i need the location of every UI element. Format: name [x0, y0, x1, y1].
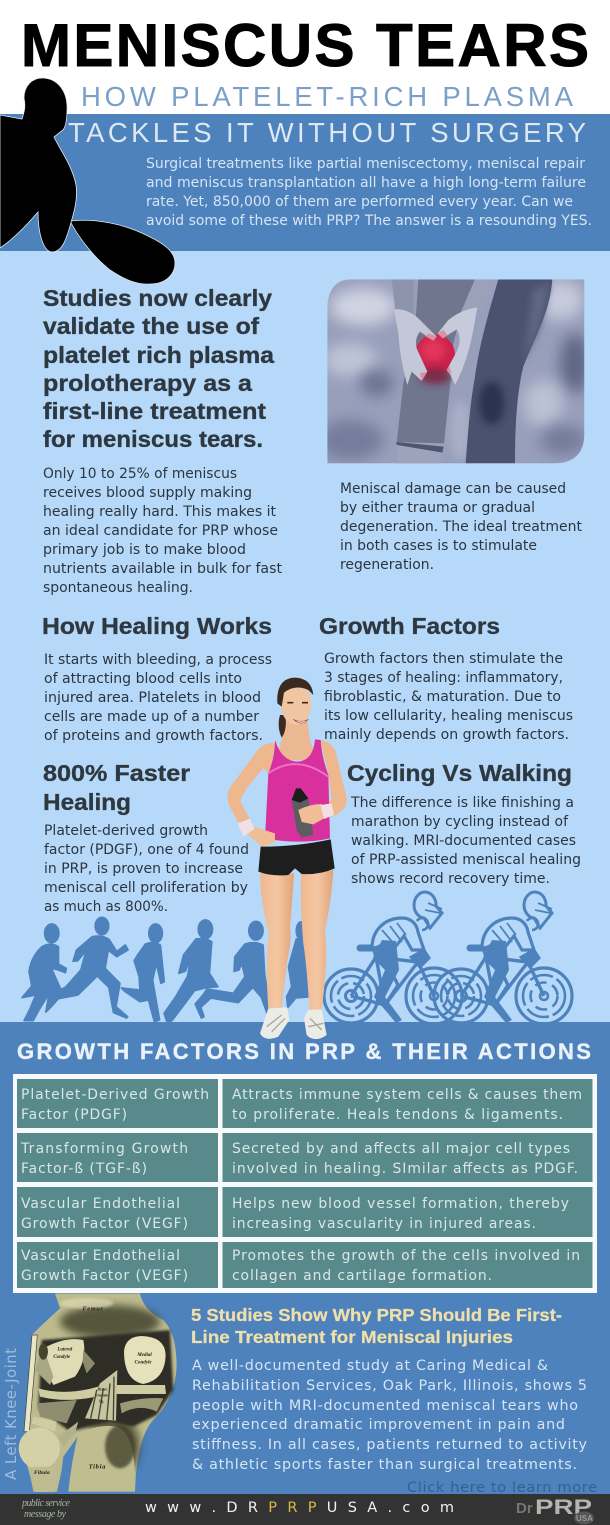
- text: caring medical study: people with MRI-documented meniscal tears who: [192, 1398, 578, 1414]
- anatomy labels: [34, 1306, 152, 1476]
- row: VEGF collagen: Promotes the growth of the cells involved in: [232, 1248, 580, 1264]
- heading: 5 studies: 5 Studies Show Why PRP Should Be First-: [191, 1305, 562, 1325]
- row: PDGF: Platelet-Derived Growth: [21, 1087, 209, 1103]
- text: growth factors: [324, 651, 573, 743]
- background: dark footer: [0, 1494, 610, 1525]
- background: light blue body: [0, 251, 610, 1022]
- icon: runner silhouettes: [22, 917, 311, 1023]
- logo: Dr PRP USA: [516, 1496, 594, 1524]
- main heading: platelet rich plasma: [43, 342, 275, 368]
- text: how healing works: cells are made up of a number: [44, 709, 259, 725]
- text: blood supply: [43, 466, 282, 596]
- row: VEGF blood vessels: Vascular Endothelial: [21, 1196, 180, 1212]
- text: caring medical study: experienced dramatic improvement in pain and: [192, 1417, 565, 1433]
- shorts: [258, 839, 335, 875]
- text: blood supply: primary job is to make blood: [43, 542, 246, 558]
- anatomy labels: Femur: [82, 1306, 104, 1313]
- text: caring medical study: Rehabilitation Services, Oak Park, Illinois, shows 5: [192, 1378, 587, 1394]
- text: blood supply: an ideal candidate for PRP whose: [43, 523, 278, 539]
- shoes: [260, 1007, 289, 1039]
- hair and ponytail: [279, 715, 286, 738]
- intro paragraph: and meniscus transplantation all have a high long-term failure: [146, 175, 586, 191]
- text: cycling vs walking: [350, 795, 581, 887]
- left arm: [228, 743, 276, 828]
- background: intro blue band: [0, 114, 610, 251]
- text: 800% faster healing: meniscal cell proliferation by: [44, 880, 248, 896]
- text: cycling vs walking: The difference is like finishing a: [350, 795, 574, 811]
- anatomy labels: Fibula: [34, 1470, 50, 1476]
- anatomy labels: Condyle: [53, 1355, 71, 1360]
- heading: 800% faster healing: [43, 760, 190, 815]
- intro paragraph: Surgical treatments like partial meniscectomy, meniscal repair: [146, 156, 585, 172]
- anatomy labels: Condyle: [135, 1361, 152, 1366]
- text: growth factors: its low cellularity, healing meniscus: [324, 708, 573, 724]
- row: TGF: involved in healing. SImilar affects as PDGF.: [232, 1161, 578, 1177]
- row: VEGF collagen: Vascular Endothelial: [21, 1248, 180, 1264]
- vertical caption: a left knee-joint: A Left Knee-Joint: [2, 1348, 20, 1480]
- row: VEGF blood vessels: Growth Factor (VEGF): [21, 1216, 188, 1232]
- row: VEGF collagen: collagen and cartilage formation.: [232, 1268, 492, 1284]
- heading: how healing works: How Healing Works: [42, 613, 272, 639]
- girl: smiling woman in pink top: [228, 678, 347, 1039]
- row: VEGF collagen: [17, 1242, 592, 1288]
- heading: 5 studies: Line Treatment for Meniscal Injuries: [191, 1327, 513, 1347]
- text: 800% faster healing: factor (PDGF), one of 4 found: [44, 842, 249, 858]
- row: PDGF: Factor (PDGF): [21, 1107, 127, 1123]
- text: how healing works: It starts with bleeding, a process: [44, 652, 272, 668]
- title: MENISCUS TEARS: [21, 12, 589, 79]
- row: PDGF: to proliferate. Heals tendons & ligaments.: [232, 1107, 563, 1123]
- intro paragraph: [146, 156, 592, 229]
- subtitle line one: HOW PLATELET-RICH PLASMA: [81, 81, 574, 112]
- intro paragraph: rate. Yet, 850,000 of them are performed every year. Can we: [146, 194, 573, 210]
- heading: 800% faster healing: 800% Faster: [43, 760, 190, 786]
- anatomy labels: Medial: [136, 1353, 152, 1358]
- text: caring medical study: stiffness. In all cases, patients returned to activity: [192, 1437, 588, 1453]
- background: table and studies blue band: [0, 1022, 610, 1494]
- text: 800% faster healing: [44, 823, 249, 915]
- right hand and wristband: [298, 804, 324, 824]
- footer band cover: [0, 1494, 610, 1525]
- text: growth factors: mainly depends on growth factors.: [324, 727, 569, 743]
- text: caring medical study: [192, 1358, 588, 1473]
- text: cycling vs walking: walking. MRI-documented cases: [351, 833, 576, 849]
- hand on hip: [245, 827, 275, 847]
- text: meniscal damage: by either trauma or gradual: [340, 500, 535, 516]
- footer: public service message: public service: [21, 1498, 71, 1509]
- text: how healing works: [44, 652, 272, 744]
- text: 800% faster healing: as much as 800%.: [44, 899, 168, 915]
- text: growth factors: 3 stages of healing: inflammatory,: [324, 670, 563, 686]
- text: meniscal damage: in both cases is to stimulate: [340, 538, 537, 554]
- section heading: growth factors in PRP: GROWTH FACTORS IN PRP & THEIR ACTIONS: [17, 1039, 591, 1064]
- row: PDGF: Attracts immune system cells & causes them: [232, 1087, 582, 1103]
- text: meniscal damage: [340, 481, 582, 573]
- anatomy labels: Lateral: [56, 1348, 73, 1353]
- icon: cyclist two: [434, 892, 572, 1024]
- text: growth factors: fibroblastic, & maturation. Due to: [324, 689, 561, 705]
- main heading: prolotherapy as a: [43, 370, 253, 396]
- background: header white: [0, 0, 610, 114]
- row: PDGF: [17, 1079, 592, 1128]
- footer: public service message: [21, 1498, 71, 1520]
- row: VEGF blood vessels: Helps new blood vessel formation, thereby: [232, 1196, 569, 1212]
- text: blood supply: Only 10 to 25% of meniscus: [43, 466, 237, 482]
- link: click here to learn more: Click here to learn more: [407, 1480, 597, 1496]
- text: how healing works: of proteins and growth factors.: [44, 728, 263, 744]
- heading: 800% faster healing: Healing: [43, 789, 131, 815]
- text: caring medical study: & athletic sports faster than surgical treatments.: [192, 1457, 577, 1473]
- anatomy labels: Tibia: [89, 1464, 106, 1471]
- text: meniscal damage: Meniscal damage can be caused: [340, 481, 566, 497]
- row: VEGF collagen: Growth Factor (VEGF): [21, 1268, 188, 1284]
- main heading: validate the use of: [43, 313, 259, 339]
- left leg: [397, 279, 475, 443]
- text: meniscal damage: degeneration. The ideal treatment: [340, 519, 582, 535]
- main heading: for meniscus tears.: [43, 426, 263, 452]
- text: how healing works: injured area. Platelets in blood: [44, 690, 261, 706]
- row: VEGF blood vessels: [17, 1187, 592, 1237]
- text: cycling vs walking: marathon by cycling instead of: [351, 814, 569, 830]
- anatomy: knee joint illustration: [19, 1293, 177, 1493]
- heading: growth factors: Growth Factors: [319, 613, 500, 639]
- face: [281, 683, 311, 725]
- right leg drawn behind: [466, 279, 552, 463]
- text: meniscal damage: regeneration.: [340, 557, 434, 573]
- heading: cycling vs walking: Cycling Vs Walking: [347, 760, 572, 786]
- subtitle line two: TACKLES IT WITHOUT SURGERY: [68, 117, 586, 148]
- logo: Dr PRP USA: USA: [576, 1514, 593, 1523]
- left wristband: [238, 819, 254, 837]
- right arm: [320, 740, 347, 819]
- text: how healing works: of attracting blood cells into: [44, 671, 242, 687]
- row: TGF: [17, 1133, 592, 1182]
- anatomy labels: lig.: [99, 1400, 104, 1404]
- anatomy labels: cruciate: [96, 1394, 109, 1398]
- main heading: [43, 285, 275, 452]
- text: blood supply: nutrients available in bulk for fast: [43, 561, 282, 577]
- row: TGF: Secreted by and affects all major cell types: [232, 1141, 570, 1157]
- water bottle: [292, 788, 313, 838]
- text: cycling vs walking: shows record recovery time.: [351, 871, 550, 887]
- legs: [260, 873, 294, 1008]
- main heading: Studies now clearly: [43, 285, 272, 311]
- row: VEGF blood vessels: increasing vascularity in injured areas.: [232, 1216, 536, 1232]
- text: growth factors: Growth factors then stimulate the: [324, 651, 563, 667]
- icon: black knee silhouette: [0, 78, 175, 284]
- logo: Dr PRP USA: Dr: [516, 1500, 533, 1517]
- text: cycling vs walking: of PRP-assisted meniscal healing: [351, 852, 581, 868]
- text: caring medical study: A well-documented study at Caring Medical &: [192, 1358, 548, 1374]
- text: blood supply: receives blood supply making: [43, 485, 252, 501]
- intro paragraph: avoid some of these with PRP? The answer is a resounding YES.: [146, 213, 592, 229]
- row: TGF: Factor-ß (TGF-ß): [21, 1161, 147, 1177]
- text: blood supply: healing really hard. This makes it: [43, 504, 276, 520]
- red knee: [415, 334, 455, 376]
- arms and hands: [392, 279, 413, 315]
- footer: website address: w w w . D R P R P U S A . c o m: [145, 1500, 454, 1516]
- photo: knee with red pain highlight: [327, 280, 584, 464]
- footer: public service message: message by: [24, 1509, 67, 1520]
- heading: 5 studies: [191, 1305, 562, 1347]
- logo: Dr PRP USA: PRP: [535, 1496, 592, 1519]
- anatomy labels: Poster.: [97, 1388, 108, 1392]
- row: TGF: Transforming Growth: [20, 1141, 188, 1157]
- text: blood supply: spontaneous healing.: [43, 580, 193, 596]
- main heading: first-line treatment: [43, 398, 266, 424]
- icon: cyclist one: [324, 892, 462, 1024]
- text: 800% faster healing: in PRP, is proven to increase: [44, 861, 243, 877]
- pink top: [265, 739, 330, 842]
- text: 800% faster healing: Platelet-derived growth: [44, 823, 208, 839]
- table: growth factors and actions: [13, 1074, 597, 1293]
- neck and chest: [275, 720, 317, 760]
